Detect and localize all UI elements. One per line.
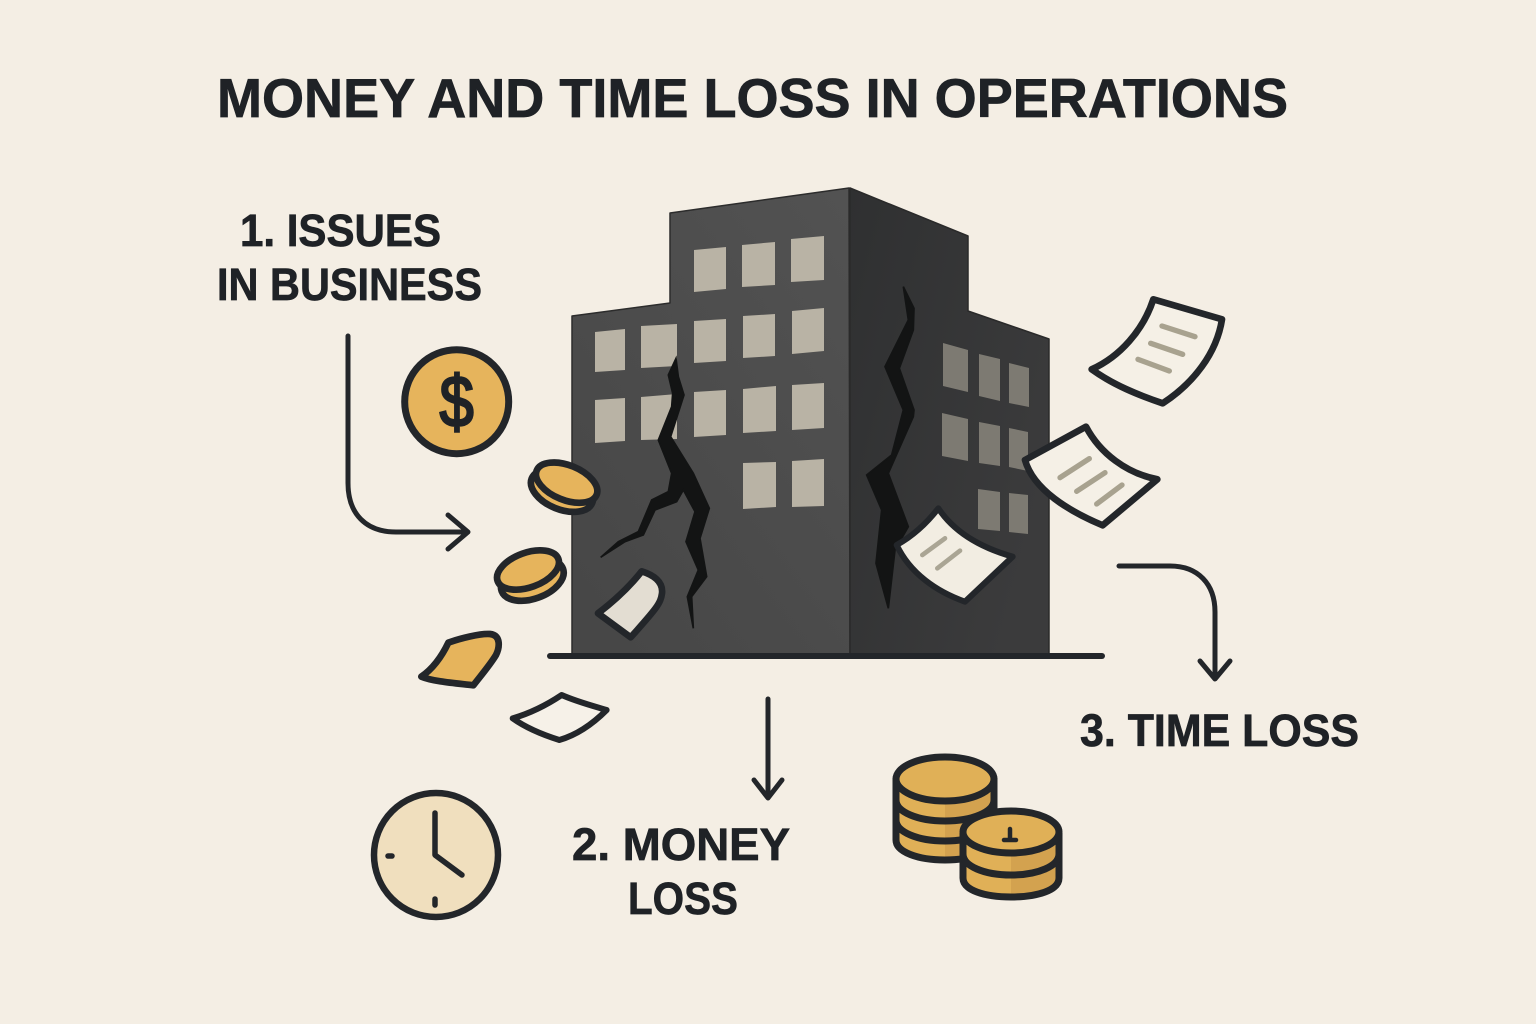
label: 2. money loss: 2. MONEY bbox=[572, 819, 790, 870]
icon: paper on side wall bbox=[897, 508, 1013, 602]
icon: paper on front wall bbox=[598, 571, 662, 637]
arrow: to time loss bbox=[1119, 566, 1230, 679]
front windows bbox=[595, 236, 824, 509]
crack: side wall bbox=[867, 287, 914, 608]
icon: falling coin lower bbox=[492, 543, 569, 609]
building front face bbox=[572, 188, 850, 655]
title: MONEY AND TIME LOSS IN OPERATIONS bbox=[217, 67, 1288, 129]
arrow: issues into building bbox=[348, 336, 468, 549]
icon: blank paper on ground bbox=[513, 695, 607, 740]
label: 1. issues in business: IN BUSINESS bbox=[217, 259, 482, 310]
icon: gold note bbox=[421, 634, 499, 685]
side windows bbox=[942, 343, 1029, 534]
icon: coin stack large bbox=[896, 757, 994, 860]
ground line bbox=[550, 653, 1102, 659]
icon: dollar coin bbox=[405, 350, 509, 454]
icon: clock bbox=[374, 793, 498, 917]
arrow: to money loss bbox=[754, 699, 782, 798]
label: 1. issues in business bbox=[217, 205, 482, 310]
icon: coin stack small bbox=[963, 811, 1059, 897]
icon: flying paper upper bbox=[1092, 299, 1222, 403]
icon: flying paper lower bbox=[1025, 427, 1157, 525]
icon: dollar coin: $ bbox=[440, 363, 474, 443]
label: 1. issues in business: 1. ISSUES bbox=[240, 205, 441, 256]
label: 2. money loss: LOSS bbox=[628, 873, 738, 924]
building side face bbox=[850, 188, 1049, 655]
icon: falling coin upper bbox=[525, 454, 603, 520]
crack: front wall bbox=[601, 358, 709, 628]
label: 3. time loss: 3. TIME LOSS bbox=[1080, 705, 1359, 756]
label: 2. money loss bbox=[572, 819, 790, 924]
building bbox=[572, 188, 1049, 655]
